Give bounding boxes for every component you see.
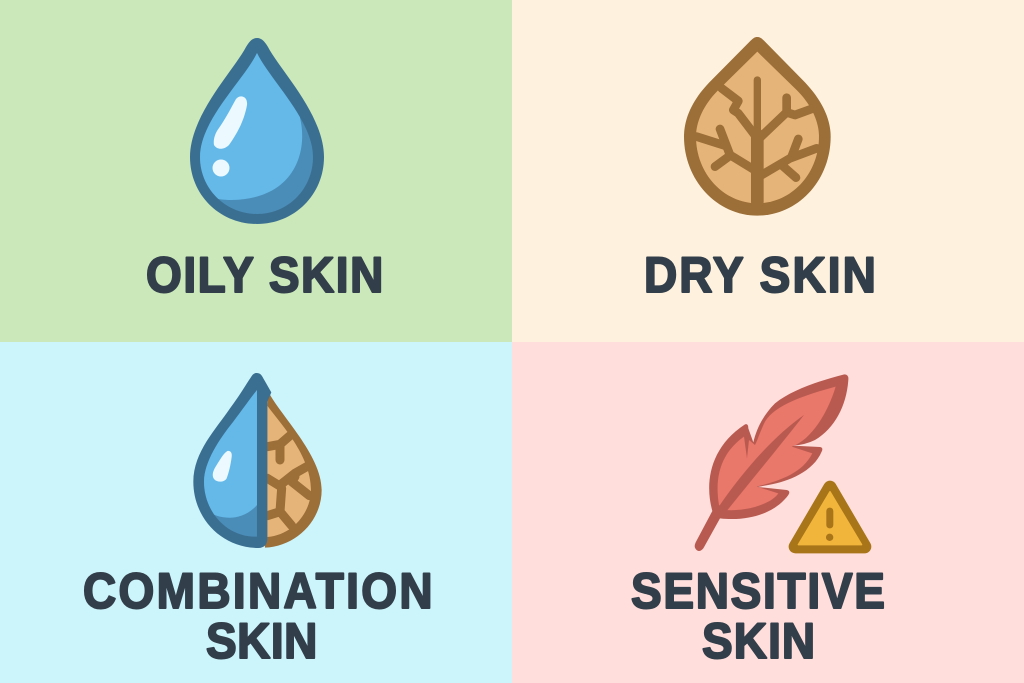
- icon: feather: [695, 374, 848, 551]
- heading: combination skin: [83, 564, 433, 669]
- icon: warning triangle: [795, 487, 865, 547]
- heading: combination skin: COMBINATION: [83, 564, 433, 619]
- heading: dry skin: DRY SKIN: [644, 248, 876, 303]
- heading: sensitive skin: SENSITIVE: [631, 564, 885, 619]
- heading: sensitive skin: SKIN: [702, 614, 815, 669]
- panel: combination skin: [0, 342, 512, 683]
- icon: half drop half cracked: [193, 373, 322, 548]
- icon: oil drop: [190, 38, 324, 224]
- panel: oily skin: [0, 0, 512, 342]
- heading: oily skin: OILY SKIN: [146, 248, 383, 303]
- heading: sensitive skin: [631, 564, 885, 669]
- panel: sensitive skin: [512, 342, 1024, 683]
- icon: dry cracked leaf: [684, 37, 831, 216]
- heading: combination skin: SKIN: [206, 614, 317, 669]
- panel: dry skin: [512, 0, 1024, 342]
